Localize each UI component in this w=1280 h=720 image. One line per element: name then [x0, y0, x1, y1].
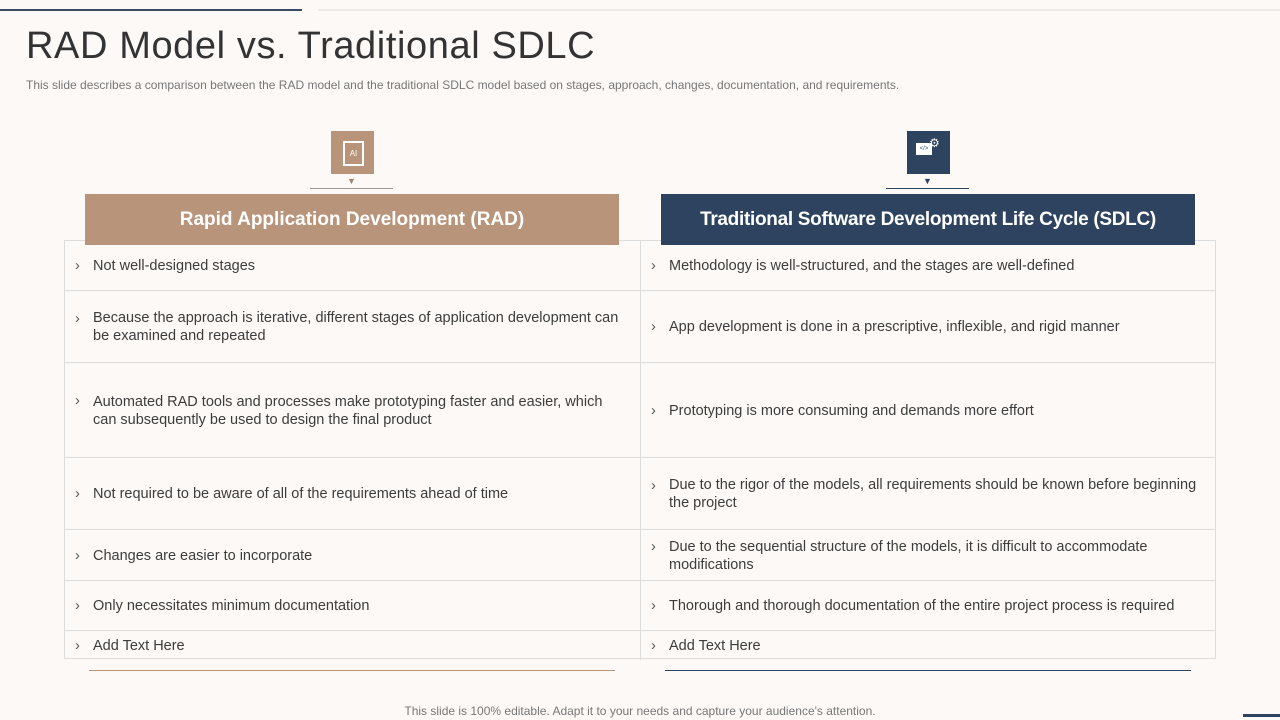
text: › [651, 319, 656, 335]
text: › [651, 402, 656, 418]
text: Only necessitates minimum documentation [93, 598, 369, 614]
text: Not required to be aware of all of the requirements ahead of time [93, 486, 508, 502]
header: RAD: Rapid Application Development (RAD) [180, 209, 524, 230]
text: › [75, 311, 80, 327]
text: Add Text Here [669, 638, 761, 654]
text: › [651, 478, 656, 494]
text: Due to the sequential structure of the models, it is difficult to accommodate modifications [669, 538, 1147, 572]
text: Add Text Here [93, 638, 185, 654]
subtitle: This slide describes a comparison between the RAD model and the traditional SDLC model based on stages, approach, changes, documentation, and requirements. [26, 78, 899, 92]
text: › [75, 598, 80, 614]
RAD column [75, 258, 618, 654]
text: Changes are easier to incorporate [93, 548, 312, 564]
icon: code monitor: ⚙ [929, 136, 940, 150]
text: Automated RAD tools and processes make prototyping faster and easier, which can subsequently be used to design the final product [93, 394, 602, 428]
icon: code monitor: </> [920, 146, 928, 152]
text: App development is done in a prescriptive, inflexible, and rigid manner [669, 319, 1120, 335]
text: Due to the rigor of the models, all requirements should be known before beginning the project [669, 477, 1196, 511]
title: RAD Model vs. Traditional SDLC [26, 25, 595, 67]
text: › [651, 258, 656, 274]
arrow left: ▼ [347, 176, 356, 186]
text: Prototyping is more consuming and demands more effort [669, 402, 1034, 418]
header: SDLC [661, 194, 1195, 245]
text: Thorough and thorough documentation of the entire project process is required [669, 598, 1174, 614]
header: RAD [85, 194, 619, 245]
text: › [651, 539, 656, 555]
text: Not well-designed stages [93, 258, 255, 274]
text: › [651, 598, 656, 614]
text: › [651, 638, 656, 654]
text: Because the approach is iterative, different stages of application development can be examined and repeated [93, 310, 618, 344]
arrow right: ▼ [923, 176, 932, 186]
text: › [75, 393, 80, 409]
text: › [75, 638, 80, 654]
icon: code monitor [907, 131, 950, 174]
text: Methodology is well-structured, and the stages are well-defined [669, 258, 1074, 274]
text: › [75, 548, 80, 564]
text: › [75, 486, 80, 502]
icon: AI chip: AI [350, 149, 357, 158]
footer: This slide is 100% editable. Adapt it to your needs and capture your audience's attention. [404, 704, 876, 718]
icon: AI chip [331, 131, 374, 174]
header: SDLC: Traditional Software Development Life Cycle (SDLC) [700, 209, 1156, 230]
SDLC column [651, 258, 1196, 654]
text: › [75, 258, 80, 274]
table [64, 240, 1216, 659]
